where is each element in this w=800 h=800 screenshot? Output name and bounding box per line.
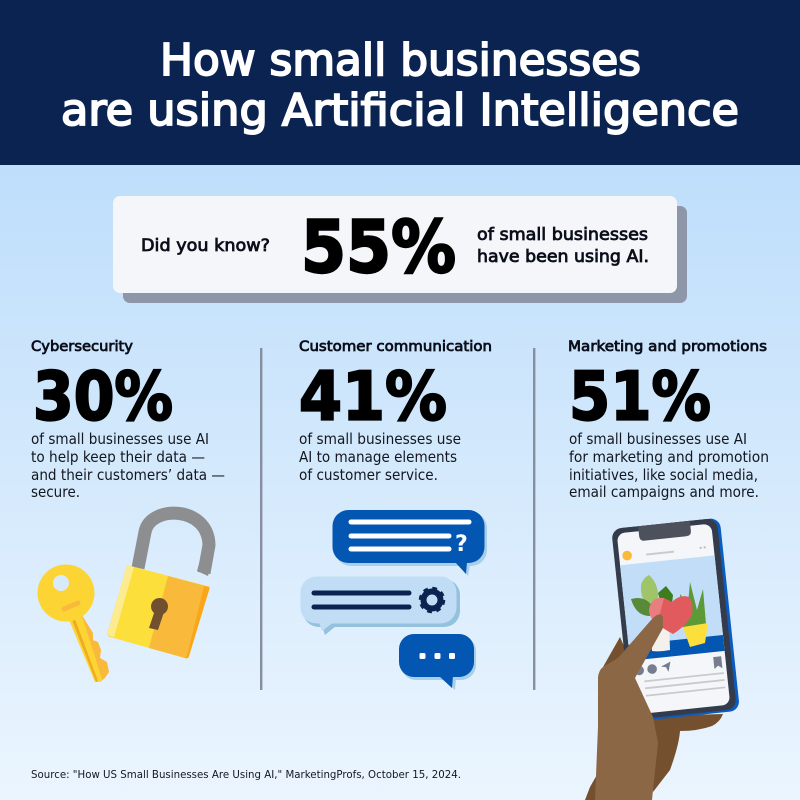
header band [0, 0, 800, 165]
body text: of small businesses use AI [31, 430, 209, 448]
heading: Cybersecurity [31, 339, 133, 355]
panel: customer communication [299, 339, 492, 690]
body text: email campaigns and more. [569, 483, 759, 501]
icon: hand holding phone [585, 518, 740, 800]
stat 41%: 41% [299, 358, 447, 436]
body text: secure. [31, 483, 80, 501]
body text: initiatives, like social media, [569, 466, 758, 484]
icon: typing bubble [399, 634, 476, 690]
body text [31, 430, 225, 501]
title: How small businesses [160, 35, 641, 86]
icon: settings bubble [300, 576, 460, 635]
body text: of small businesses use [299, 430, 461, 448]
background [0, 165, 800, 800]
body text: of small businesses use AI [569, 430, 747, 448]
source note: Source: "How US Small Businesses Are Using AI," MarketingProfs, October 15, 2024. [31, 768, 461, 781]
icon: key [38, 564, 109, 682]
panel: did you know callout [113, 196, 687, 303]
icon: gear [422, 590, 442, 610]
stat 51%: 51% [569, 358, 711, 436]
icon: question bubble [332, 510, 487, 576]
icon: padlock [107, 513, 211, 658]
panel: marketing and promotions [568, 339, 769, 800]
icon: question bubble: ? [455, 532, 468, 557]
phone [611, 518, 740, 722]
heading: Marketing and promotions [568, 339, 767, 355]
hand back [585, 637, 723, 800]
hand front and thumb [595, 614, 663, 800]
body text [569, 430, 769, 501]
callout text: of small businesses [477, 225, 648, 245]
stat 30%: 30% [33, 358, 173, 436]
title [61, 35, 739, 136]
body text: and their customers’ data — [31, 466, 225, 484]
plant illustration [631, 575, 708, 651]
body text: to help keep their data — [31, 448, 205, 466]
body text [299, 430, 461, 484]
did you know label: Did you know? [141, 236, 270, 256]
heading: Customer communication [299, 339, 492, 355]
callout text [477, 225, 649, 267]
big number 55%: 55% [301, 205, 456, 289]
body text: AI to manage elements [299, 448, 457, 466]
callout text: have been using AI. [477, 247, 649, 267]
body text: for marketing and promotion [569, 448, 769, 466]
body text: of customer service. [299, 466, 438, 484]
panel: cybersecurity [31, 339, 225, 682]
title: are using Artificial Intelligence [61, 85, 739, 136]
